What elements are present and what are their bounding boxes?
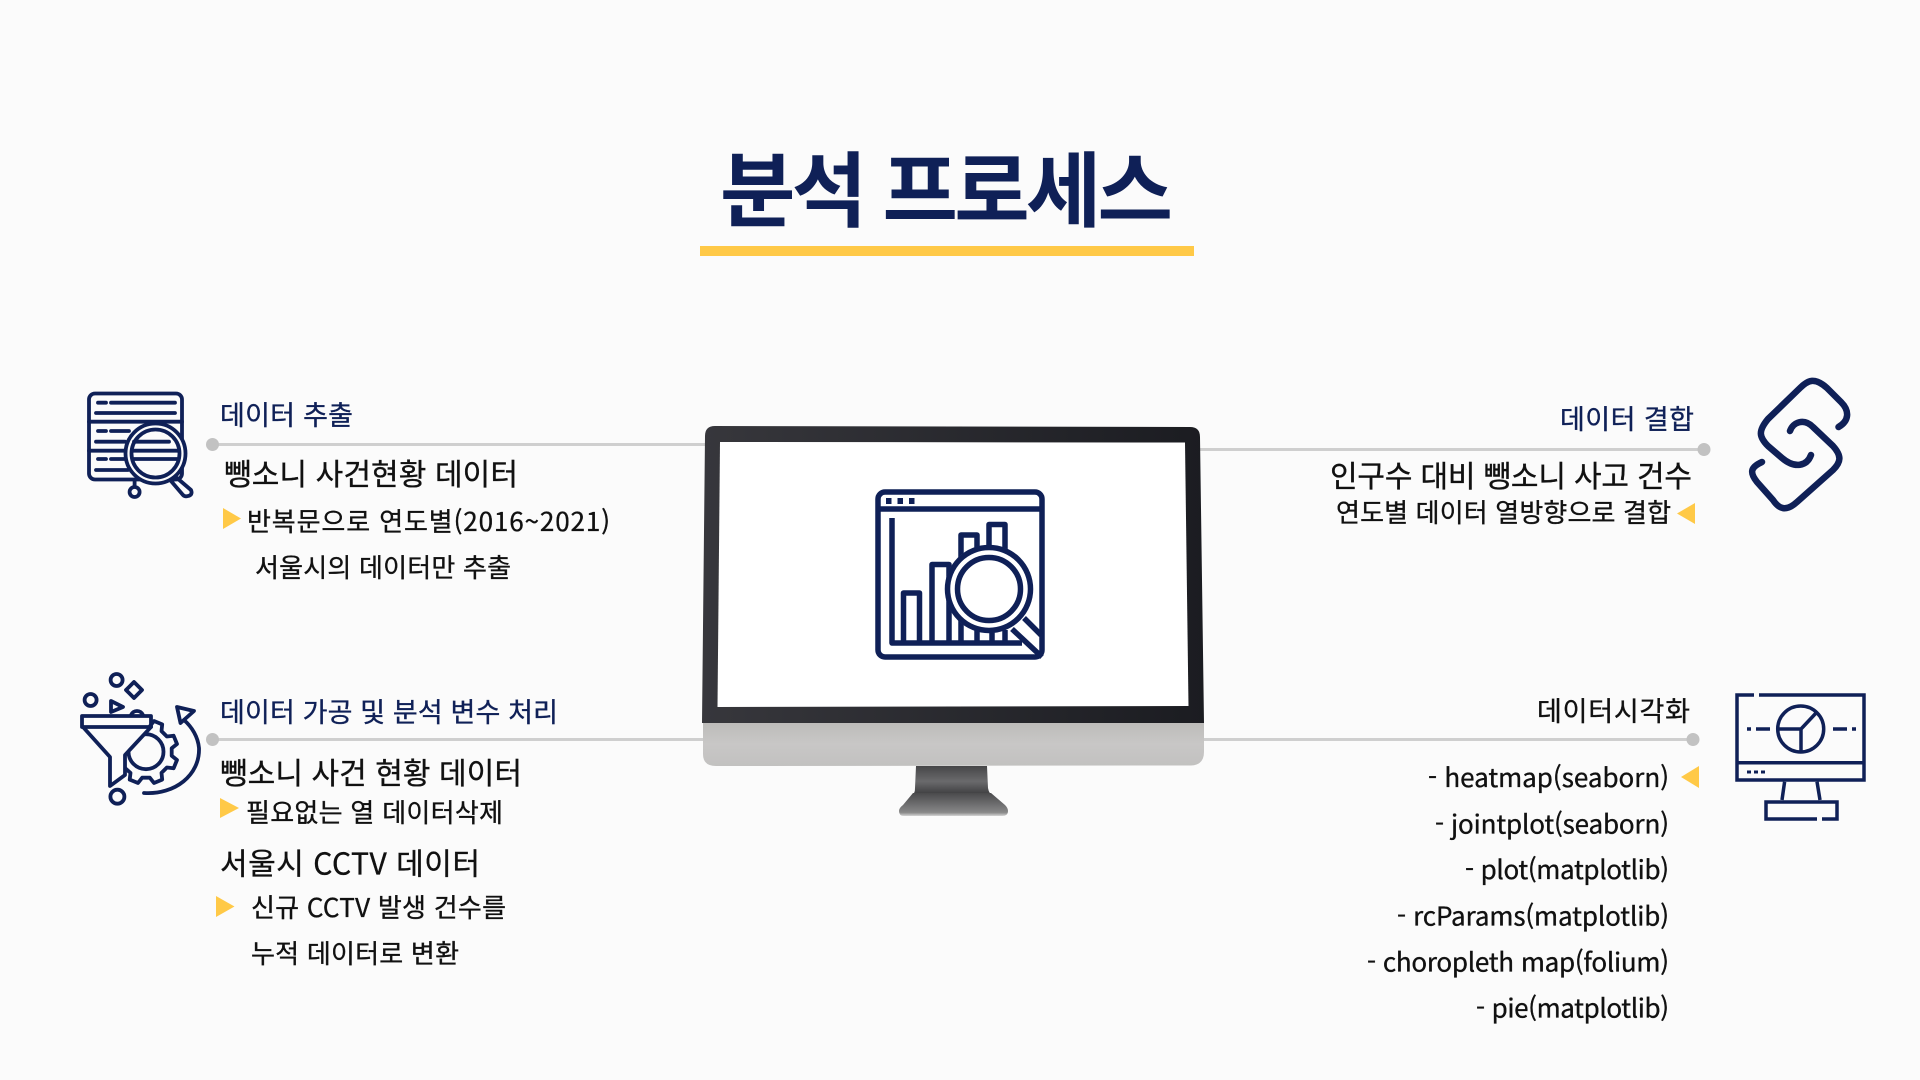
monitor stand [899,766,1008,816]
heading: data join: 데이터 결합 [1560,398,1694,437]
monitor screen [718,442,1188,707]
heading: data extraction: 데이터 추출 [220,394,353,433]
text: incident data: 뺑소니 사건현황 데이터 [224,450,518,494]
heading: data processing: 데이터 가공 및 분석 변수 처리 [220,691,558,730]
text: per capita: 인구수 대비 뺑소니 사고 건수 [1330,452,1692,496]
text: Seoul only: 서울시의 데이터만 추출 [255,548,511,585]
text: cumulative: 누적 데이터로 변환 [251,934,459,971]
arrow [1677,503,1695,524]
connector lines [206,438,1710,746]
arrow [216,896,234,917]
text: loop by year: 반복문으로 연도별(2016~2021) [247,502,610,539]
panel: data processing [82,674,558,971]
list: chart types: - pie(matplotlib) [1476,988,1669,1026]
icon: funnel and gear [82,674,199,804]
text: delete columns: 필요없는 열 데이터삭제 [246,793,503,830]
text: new CCTV count: 신규 CCTV 발생 건수를 [251,888,506,925]
list: chart types: - jointplot(seaborn) [1435,804,1669,842]
panel: data extraction [89,394,610,585]
arrow [220,798,239,818]
icon: monitor with pie chart [1737,695,1864,819]
list: chart types: - rcParams(matplotlib) [1397,896,1669,934]
heading: data visualization: 데이터시각화 [1537,690,1690,729]
icon: document table with magnifier [89,394,192,497]
list: chart types: - plot(matplotlib) [1465,850,1669,887]
monitor [702,426,1204,816]
arrow [223,508,241,529]
text: CCTV data: 서울시 CCTV 데이터 [220,840,480,884]
text: join by column: 연도별 데이터 열방향으로 결합 [1336,493,1671,530]
monitor chin [703,722,1204,766]
list: chart types: - heatmap(seaborn) [1428,758,1669,795]
icon: chain link [1752,381,1847,508]
icon: chart with magnifier [878,492,1042,657]
list: chart types: - choropleth map(folium) [1367,942,1669,980]
panel: data visualization [1367,690,1864,1026]
panel: data join [1330,381,1847,530]
monitor bezel [702,426,1204,723]
text: incident data: 뺑소니 사건 현황 데이터 [220,749,522,793]
list: chart types [1367,758,1669,1026]
title: 분석 프로세스 [720,125,1173,244]
arrow [1681,766,1699,788]
